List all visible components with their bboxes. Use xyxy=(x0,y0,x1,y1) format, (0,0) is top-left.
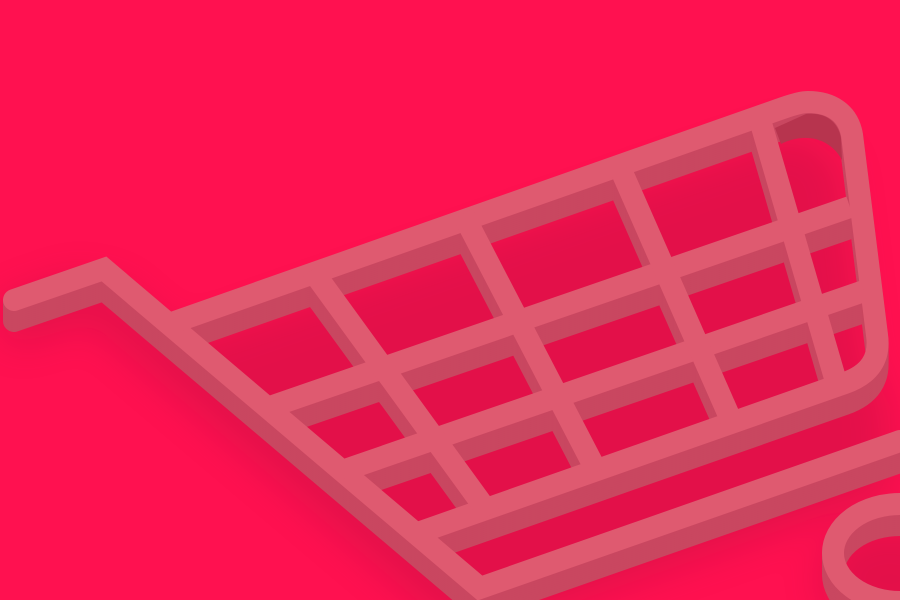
darker inner side of top right corner xyxy=(775,114,842,160)
cart drop shadow xyxy=(4,128,900,600)
